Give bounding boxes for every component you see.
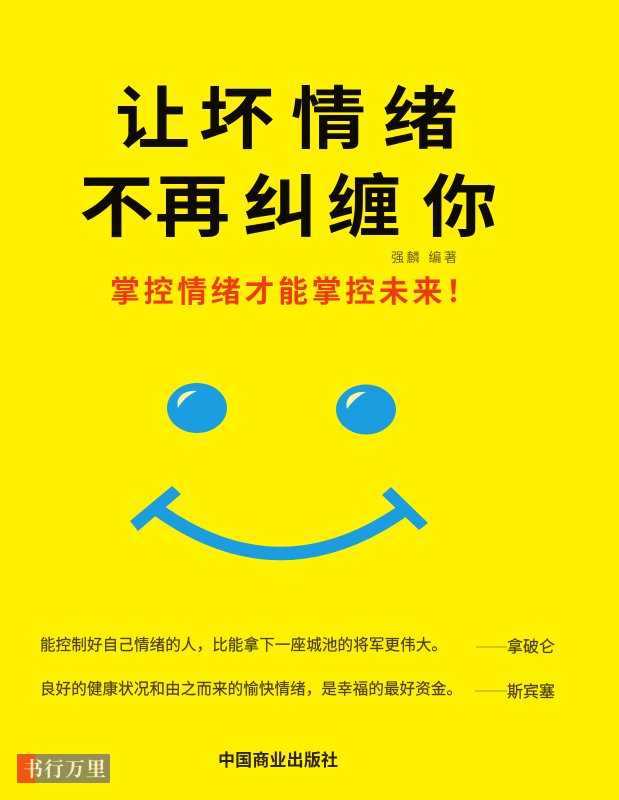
right eye (336, 384, 396, 434)
left eye (167, 383, 227, 433)
mouth (130, 486, 428, 554)
quote 2 attribution: 斯宾塞 (507, 683, 555, 701)
quote 2: 良好的健康状况和由之而来的愉快情绪，是幸福的最好资金。 (40, 680, 462, 698)
title line 1: 让坏情绪 (115, 82, 458, 158)
quote 2 attribution (475, 683, 555, 701)
quote 1: 能控制好自己情绪的人，比能拿下一座城池的将军更伟大。 (40, 635, 447, 654)
icon: smiley face (130, 383, 428, 554)
quote 1 attribution (476, 637, 555, 656)
title line 2: 不再纠缠你 (79, 170, 497, 246)
publisher: 中国商业出版社 (218, 750, 338, 770)
author: 强麟 编著 (391, 250, 457, 265)
watermark badge: 书行万里 (23, 753, 106, 782)
tagline: 掌控情绪才能掌控未来！ (110, 276, 476, 309)
quote 1 attribution: 拿破仑 (507, 637, 555, 656)
